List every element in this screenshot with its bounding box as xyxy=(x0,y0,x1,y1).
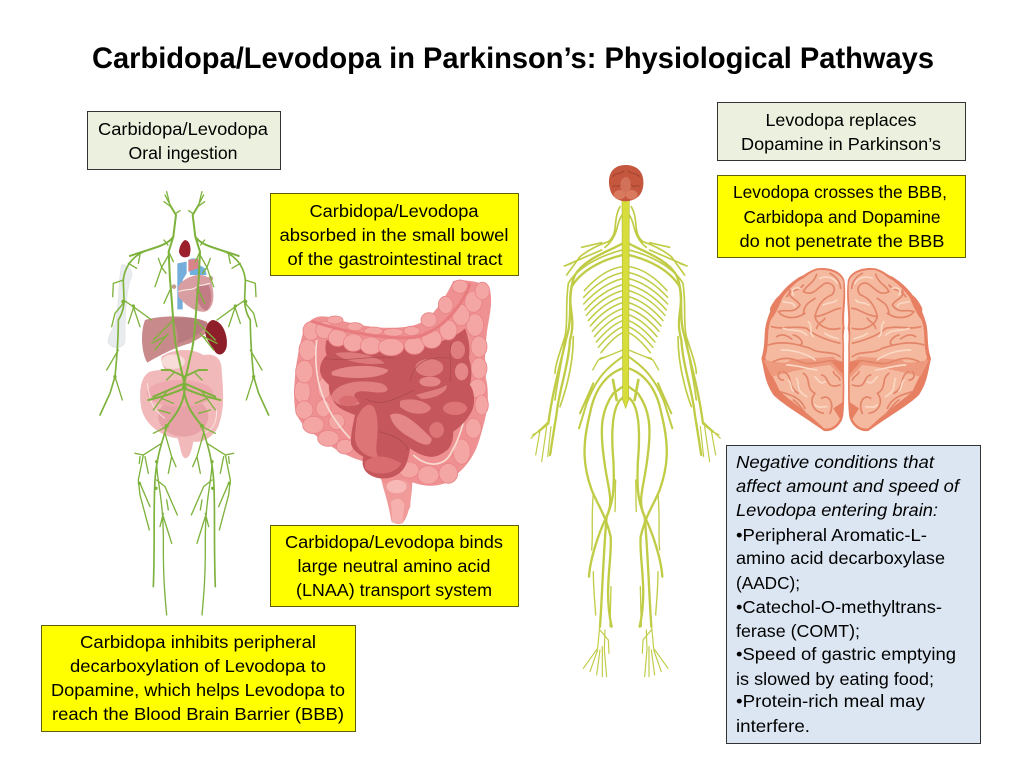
icon: thymus xyxy=(179,240,190,257)
callout: LNAA transport: large neutral amino acid xyxy=(298,556,490,576)
panel: negative conditions: amino acid decarboxylase xyxy=(736,548,945,568)
callout: absorption in small bowel xyxy=(270,194,518,276)
panel: negative conditions: is slowed by eating food; xyxy=(736,669,934,689)
panel: negative conditions: ferase (COMT); xyxy=(736,621,860,641)
icon: liver xyxy=(142,316,209,363)
callout: blood brain barrier: Carbidopa and Dopamine xyxy=(744,207,940,227)
shoulders xyxy=(564,207,623,275)
callout: LNAA transport: (LNAA) transport system xyxy=(296,580,492,600)
panel: negative conditions: •Peripheral Aromatic-L- xyxy=(736,525,927,545)
foot xyxy=(583,623,609,677)
icon: spleen xyxy=(205,320,227,354)
large intestine: descending and ascending sections xyxy=(294,280,491,524)
icon: heart xyxy=(172,258,213,312)
panel: negative conditions xyxy=(726,446,980,744)
spinal cord xyxy=(622,200,629,408)
callout: peripheral decarboxylation xyxy=(42,626,356,732)
torso to legs xyxy=(593,350,623,370)
callout: levodopa replaces dopamine: Dopamine in Parkinson’s xyxy=(741,134,941,154)
callout: absorption in small bowel: Carbidopa/Levodopa xyxy=(310,201,479,221)
right hemisphere xyxy=(847,268,931,431)
callout: oral ingestion: Carbidopa/Levodopa xyxy=(98,119,268,139)
callout: peripheral decarboxylation: decarboxylation of Levodopa to xyxy=(70,656,326,676)
callout: peripheral decarboxylation: reach the Blood Brain Barrier (BBB) xyxy=(52,704,344,724)
panel: negative conditions: •Protein-rich meal may xyxy=(736,691,925,711)
nerves: left half xyxy=(531,207,625,677)
callout: peripheral decarboxylation: Carbidopa inhibits peripheral xyxy=(80,632,316,652)
nerve tree: left half xyxy=(100,192,187,615)
callout: absorption in small bowel: absorbed in the small bowel xyxy=(280,225,508,245)
hand xyxy=(531,422,554,462)
panel: negative conditions: Levodopa entering brain: xyxy=(736,500,938,520)
callout: levodopa replaces dopamine xyxy=(718,102,966,160)
panel: negative conditions: affect amount and speed of xyxy=(736,476,961,496)
illustration: digestive tract xyxy=(294,280,491,524)
panel: negative conditions: •Speed of gastric emptying xyxy=(736,644,956,664)
callout: oral ingestion: Oral ingestion xyxy=(128,143,238,163)
callout: LNAA transport xyxy=(270,526,518,606)
icon: intestines xyxy=(140,350,223,458)
callout: absorption in small bowel: of the gastrointestinal tract xyxy=(288,249,503,269)
illustration: body with peripheral nerves and organs xyxy=(100,192,269,615)
icon: brain stem and brain xyxy=(609,165,643,201)
large intestine: transverse section xyxy=(303,280,490,356)
callout: blood brain barrier xyxy=(718,176,966,258)
panel: negative conditions: (AADC); xyxy=(736,573,800,593)
panel: negative conditions: •Catechol-O-methyltrans- xyxy=(736,597,942,617)
illustration: central and peripheral nervous system xyxy=(531,165,720,677)
callout: blood brain barrier: Levodopa crosses the BBB, xyxy=(733,182,947,202)
callout: blood brain barrier: do not penetrate the BBB xyxy=(740,231,944,251)
arms xyxy=(538,243,623,432)
title: Carbidopa/Levodopa in Parkinson’s: Physiological Pathways xyxy=(92,42,934,75)
callout: oral ingestion xyxy=(88,112,280,170)
panel: negative conditions: Negative conditions that xyxy=(736,452,935,472)
nerves: right half xyxy=(626,207,720,677)
panel: negative conditions: interfere. xyxy=(736,716,810,736)
callout: peripheral decarboxylation: Dopamine, which helps Levodopa to xyxy=(51,680,345,700)
icon: bone xyxy=(108,265,132,347)
small intestine xyxy=(320,328,474,479)
nerve tree: right half xyxy=(182,192,269,615)
illustration: brain viewed from above xyxy=(761,268,931,431)
ribs xyxy=(584,267,623,353)
callout: LNAA transport: Carbidopa/Levodopa binds xyxy=(285,532,503,552)
callout: levodopa replaces dopamine: Levodopa replaces xyxy=(766,110,917,130)
